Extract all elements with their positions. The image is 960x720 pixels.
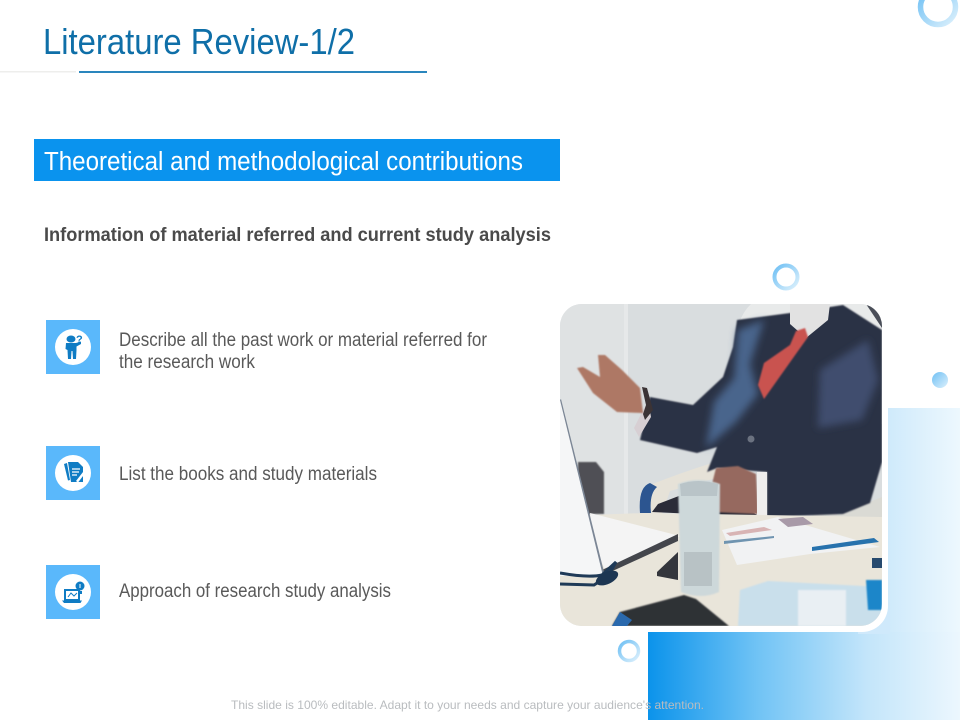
item text: List the books and study materials <box>119 464 377 485</box>
title underline <box>0 71 427 73</box>
item text: Approach of research study analysis <box>119 581 391 602</box>
decorative ring: above photo <box>774 266 798 288</box>
chair back <box>741 304 882 330</box>
shirt collar <box>790 304 830 338</box>
desk <box>560 513 882 626</box>
heading banner <box>34 139 560 181</box>
item text <box>119 330 488 373</box>
icon: laptop with light bulb <box>46 565 100 619</box>
chair arm <box>650 464 715 513</box>
footer note: This slide is 100% editable. Adapt it to your needs and capture your audience's attention. <box>231 698 704 712</box>
laptop screen <box>560 400 604 576</box>
list item 2 <box>46 446 377 500</box>
open magazine <box>722 517 880 565</box>
dark cabinet at left <box>578 462 604 514</box>
subheading: Information of material referred and current study analysis <box>44 225 551 246</box>
decorative panel: bottom gradient <box>648 632 960 720</box>
heading banner: Theoretical and methodological contributions <box>44 148 523 176</box>
watch strap <box>642 387 653 420</box>
gesturing hand <box>577 355 643 413</box>
cable knot <box>596 570 618 586</box>
item text: the research work <box>119 352 255 373</box>
list item 3 <box>46 565 391 619</box>
icon: person with question mark: ? <box>76 334 83 346</box>
suit <box>640 305 882 517</box>
decorative ring: top right <box>920 0 956 24</box>
item text: Describe all the past work or material referred for <box>119 330 488 351</box>
wall <box>560 304 882 626</box>
decorative dot: right of photo <box>932 372 948 388</box>
cable <box>560 562 616 585</box>
decorative panel: right gradient <box>888 408 960 632</box>
title: Literature Review-1/2 <box>43 21 355 62</box>
glass of water <box>678 480 720 596</box>
laptop base and keyboard <box>590 513 680 570</box>
shirt cuff <box>634 398 651 437</box>
photo: businessman at desk <box>560 304 882 626</box>
list item 1 <box>46 320 488 374</box>
icon: document with pencil <box>46 446 100 500</box>
phone under glass <box>657 552 678 580</box>
lower hand and cuff <box>710 466 758 514</box>
trousers <box>652 496 757 515</box>
decorative ring: below photo <box>620 642 638 660</box>
phone in foreground <box>612 595 729 626</box>
decorative panel: corner fill behind photo frame <box>858 602 890 634</box>
suit highlight: button and fold <box>748 436 754 442</box>
chair right arm <box>812 497 882 517</box>
blurred brochure <box>738 581 882 626</box>
laptop hinge <box>602 534 678 574</box>
photo frame <box>554 298 888 632</box>
suit highlight: chest <box>818 340 878 428</box>
suit highlight: sleeve and lapel <box>706 320 764 448</box>
tie <box>758 328 808 399</box>
icon: person with question mark <box>46 320 100 374</box>
